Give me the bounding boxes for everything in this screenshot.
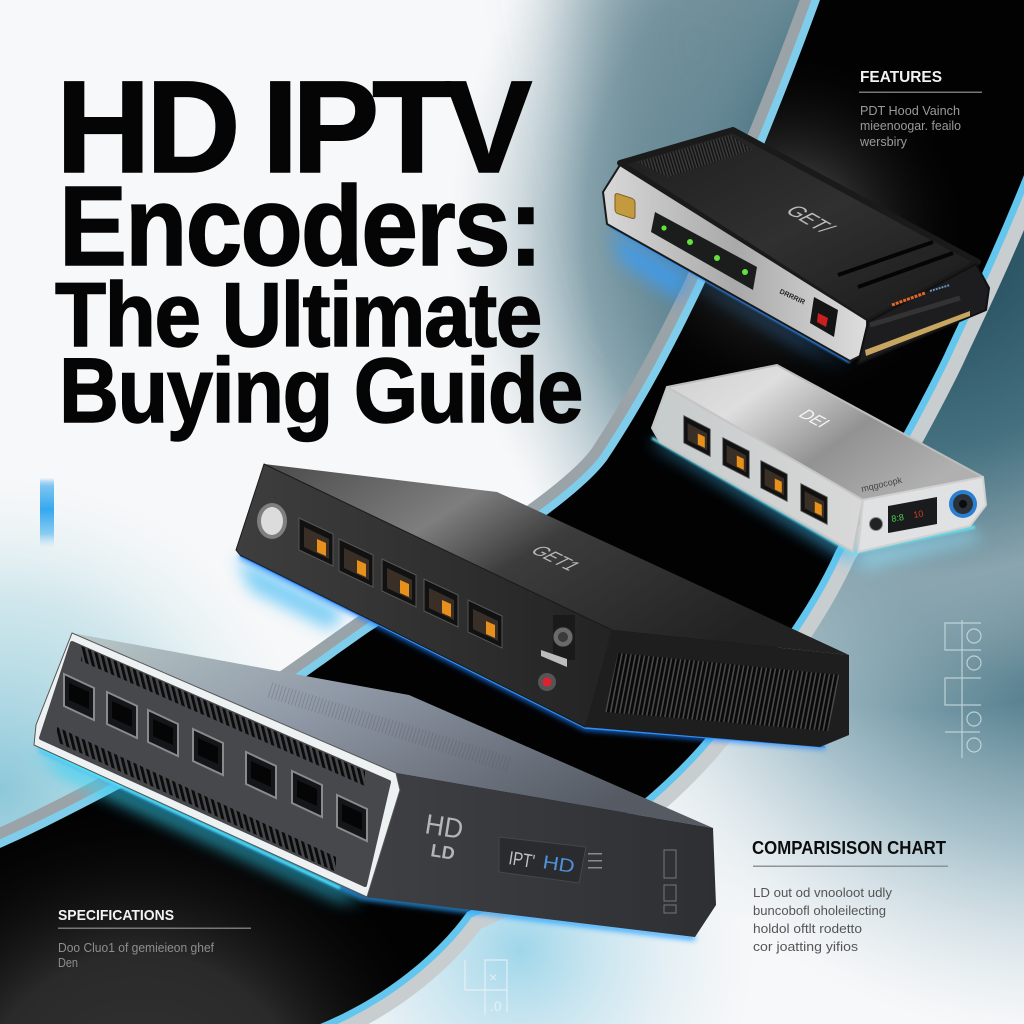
control knob xyxy=(553,615,575,660)
end face detail xyxy=(865,285,970,356)
blue socket xyxy=(949,490,977,518)
side connectors xyxy=(664,850,676,913)
brand mark: GET/ xyxy=(781,202,840,238)
title: Buying Guide xyxy=(59,340,582,442)
comparison text: LD out od vnooloot udly xyxy=(753,885,892,900)
red button xyxy=(538,673,556,691)
brand mark: GET1 xyxy=(526,542,585,574)
comparison text: holdol oftlt rodetto xyxy=(753,921,862,936)
title xyxy=(55,53,582,442)
decorative technical diagram: bottom xyxy=(465,960,507,1015)
specifications text: Den xyxy=(58,956,78,970)
HD marking: LD xyxy=(429,840,456,864)
panel: features xyxy=(859,69,982,149)
title: Encoders: xyxy=(59,163,541,289)
comparison text xyxy=(753,885,892,954)
ports xyxy=(684,416,827,524)
panel: comparison chart xyxy=(752,838,948,954)
top face xyxy=(620,130,978,322)
features text: wersbiry xyxy=(859,135,908,149)
front face xyxy=(236,464,612,727)
top face xyxy=(264,464,849,655)
red port xyxy=(778,288,838,337)
top slots xyxy=(838,242,953,287)
device: middle black encoder xyxy=(236,464,849,747)
red port: DRRRIR xyxy=(778,288,806,306)
left blue accent bar xyxy=(40,478,54,548)
top vent grille xyxy=(637,135,752,177)
white bar xyxy=(541,650,567,667)
specifications heading: SPECIFICATIONS xyxy=(58,907,174,924)
end face xyxy=(858,477,986,552)
features text xyxy=(859,104,961,149)
right face xyxy=(585,630,849,747)
ports xyxy=(299,518,502,648)
HD marking xyxy=(423,808,465,864)
dark front plate xyxy=(41,643,389,885)
side label: mqgocopk xyxy=(860,475,903,494)
comparison text: buncobofl oholeilecting xyxy=(753,903,886,918)
features text: mieenoogar. feailo xyxy=(860,119,961,133)
decorative technical diagram: bottom: .0 xyxy=(490,998,502,1014)
device: silver encoder xyxy=(652,365,986,570)
small indicators xyxy=(588,853,602,868)
IPTV display: HD xyxy=(541,852,576,878)
display: 8:8 xyxy=(891,512,905,524)
IPTV display: IPT' xyxy=(507,848,536,873)
gold connector xyxy=(615,193,635,219)
features text: PDT Hood Vainch xyxy=(860,104,960,118)
top face xyxy=(72,633,713,828)
comparison text: cor joatting yifios xyxy=(753,939,859,954)
IPTV display xyxy=(499,837,586,883)
ports xyxy=(64,674,367,841)
power button xyxy=(257,503,287,539)
HD marking: HD xyxy=(423,808,465,845)
vent grille xyxy=(605,653,840,731)
title: HD IPTV xyxy=(56,53,532,200)
white front bezel xyxy=(34,633,400,897)
front face xyxy=(652,387,863,552)
decorative technical diagram: bottom: × xyxy=(489,969,497,985)
end face xyxy=(858,264,989,364)
title: The Ultimate xyxy=(55,265,541,366)
right face xyxy=(365,773,716,937)
specifications text: Doo Cluo1 of gemieieon ghef xyxy=(58,941,215,955)
comparison heading: COMPARISISON CHART xyxy=(752,838,946,858)
LED panel xyxy=(651,212,757,290)
features heading: FEATURES xyxy=(860,69,942,86)
display xyxy=(888,497,937,533)
display: 10 xyxy=(913,508,924,520)
front silver face xyxy=(603,165,868,361)
decorative technical diagram: right xyxy=(945,620,981,758)
top face xyxy=(667,365,983,500)
vents xyxy=(57,646,365,872)
panel: specifications xyxy=(58,907,251,970)
audio jack xyxy=(870,518,882,530)
device: large front encoder xyxy=(34,633,716,938)
vent dots on top xyxy=(270,690,510,765)
brand mark: DEI xyxy=(795,406,833,431)
specifications text xyxy=(58,941,215,970)
device: top black and silver encoder xyxy=(600,130,989,368)
